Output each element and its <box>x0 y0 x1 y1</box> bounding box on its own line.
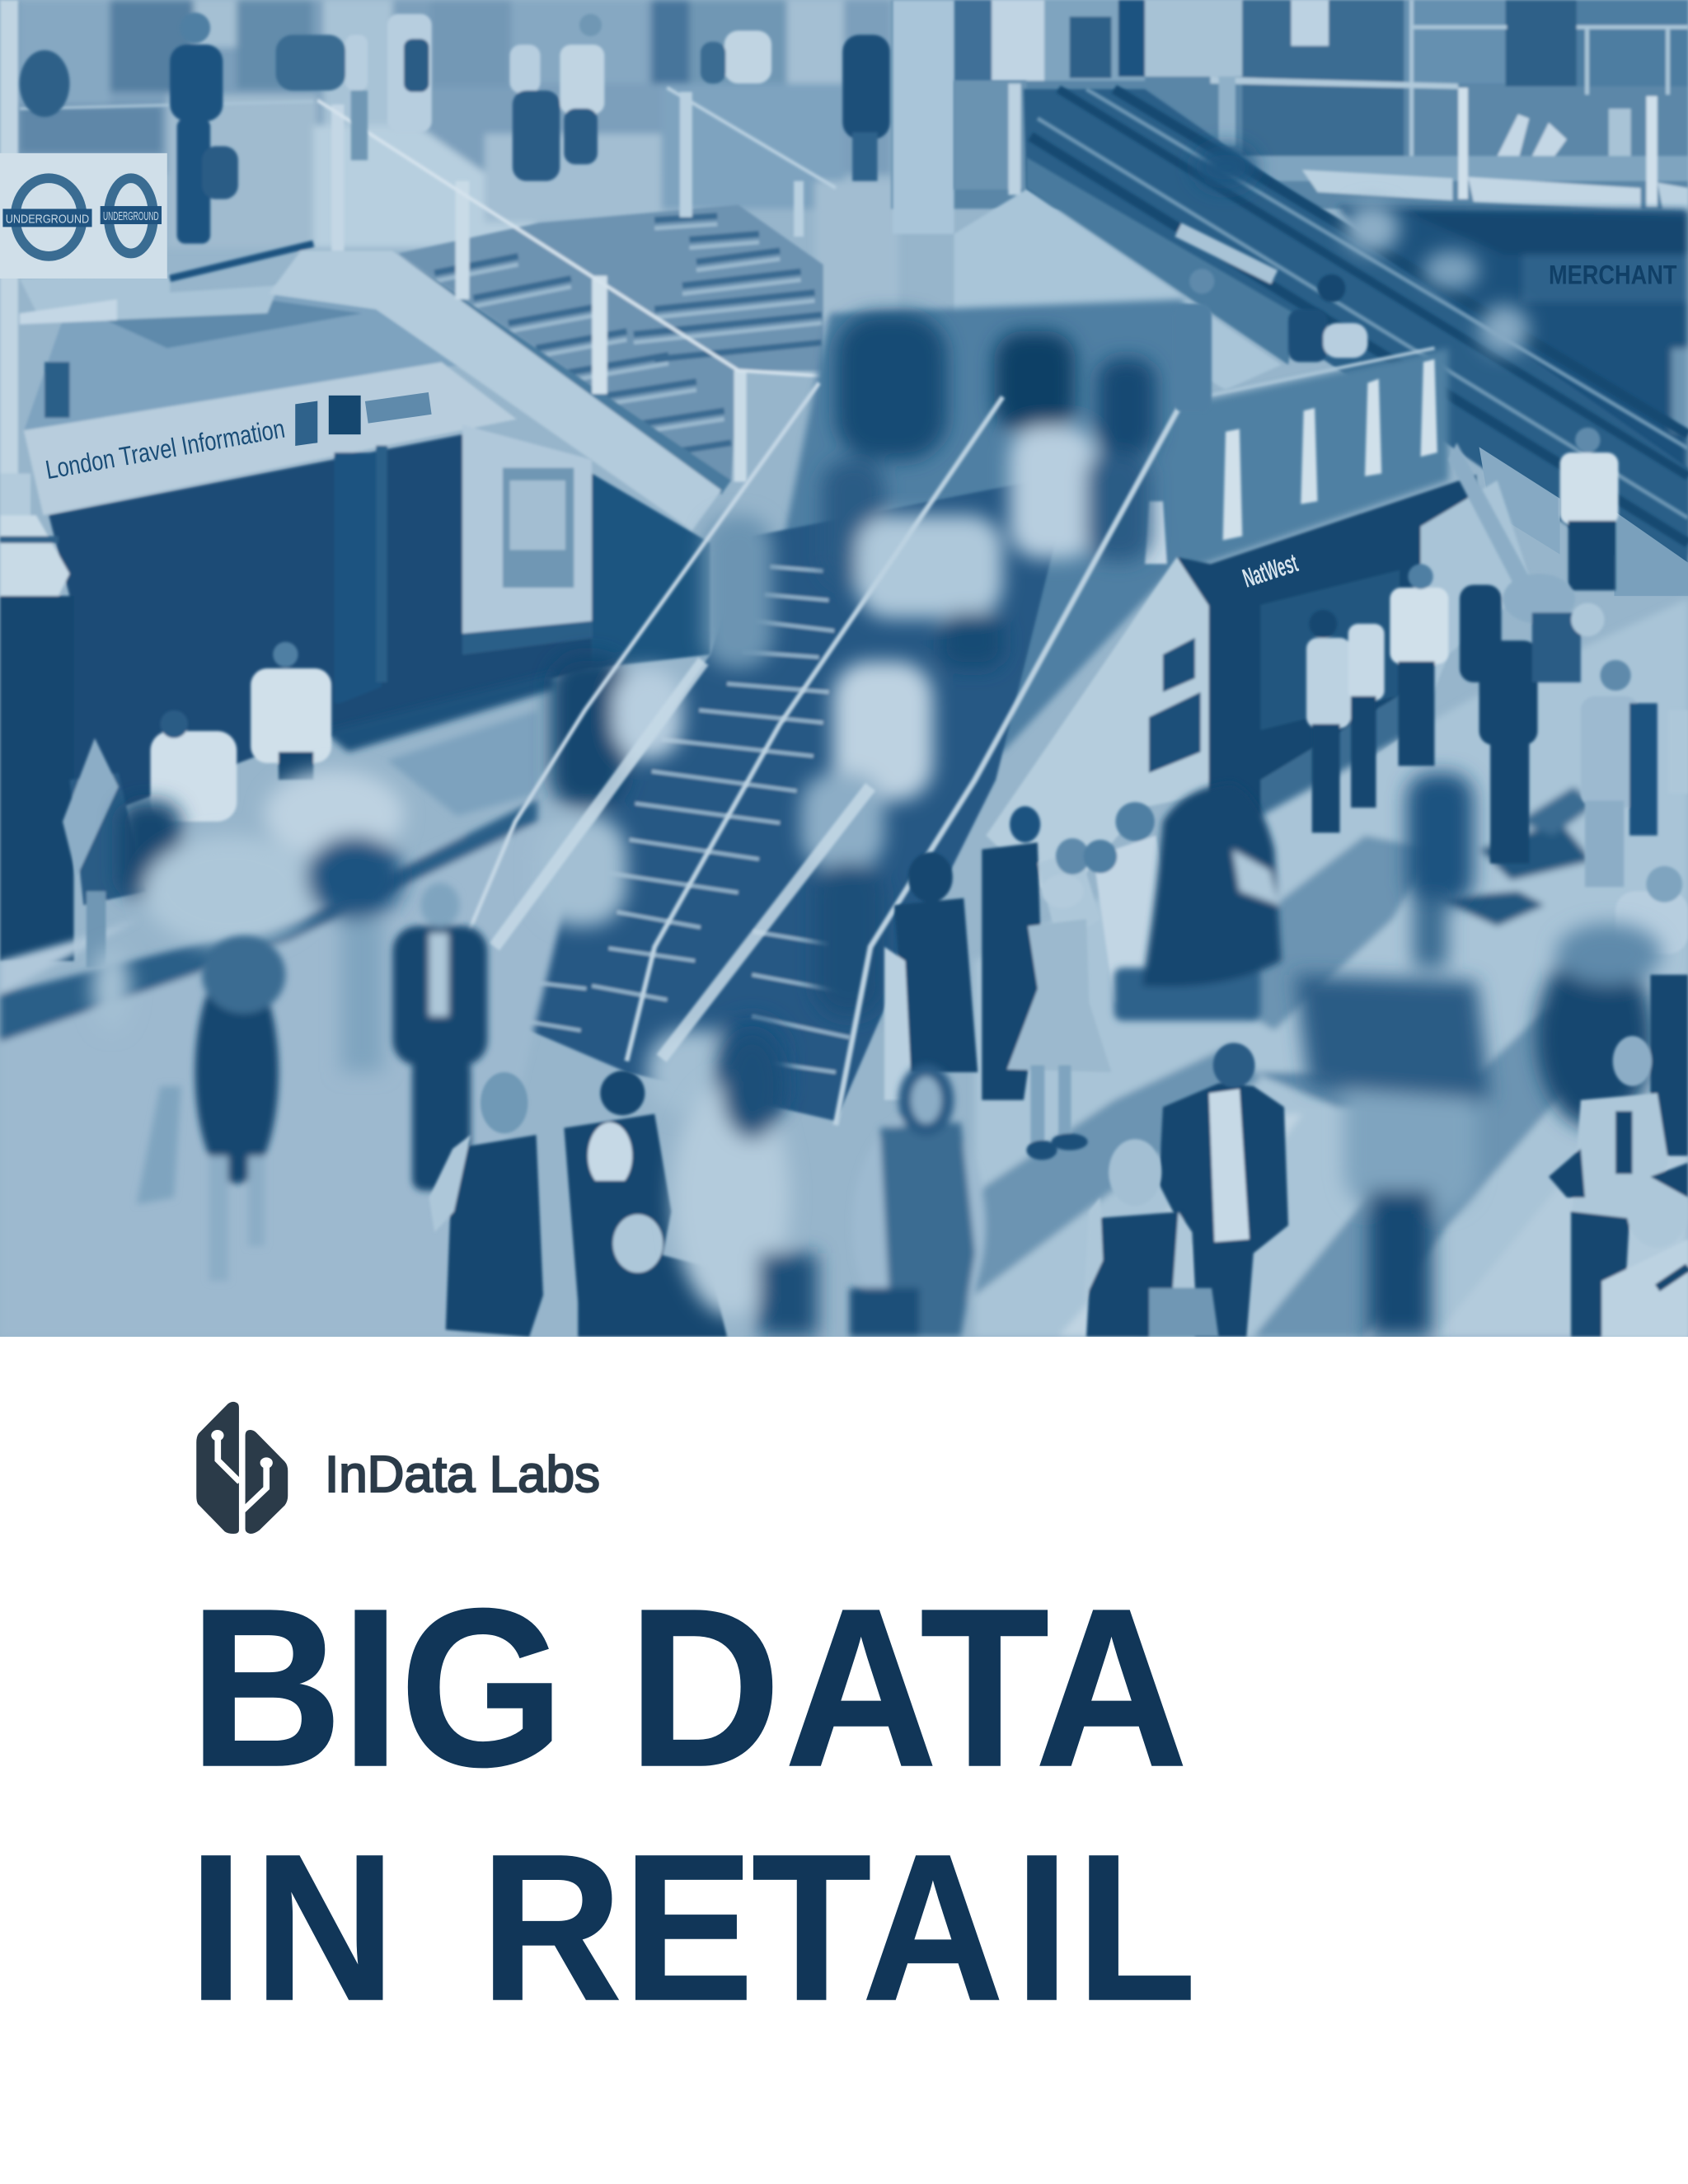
underground roundel sign <box>0 153 167 279</box>
title: big data in retail <box>189 1582 1196 2027</box>
glass balustrade posts <box>1145 348 1549 620</box>
right crowd near the booth <box>1306 564 1688 954</box>
pillar <box>893 0 954 234</box>
photo: blurred commuters in a London station, duotone blue <box>0 0 1688 1337</box>
information sign text: London Travel Information <box>43 414 287 485</box>
handrails of lower staircase <box>462 383 1181 1125</box>
stair bottom group of standing people <box>884 802 1173 1160</box>
logo circuit lines <box>214 1432 270 1511</box>
central mid tone backdrop of the blurred crowd <box>780 299 1448 752</box>
group of women at bottom centre <box>429 1071 727 1337</box>
area behind the escalator and merchant shop <box>1337 206 1688 557</box>
blurred man walking <box>1295 773 1490 1337</box>
man in dark coat <box>393 883 487 1191</box>
right top wall, windows and balcony <box>891 0 1688 213</box>
lower staircase <box>481 473 1072 1121</box>
floor stripes and mats <box>968 599 1688 1337</box>
under stair area and left column <box>0 0 710 961</box>
woman with phone <box>1084 1139 1219 1337</box>
right blurred dark group <box>1536 923 1662 1128</box>
people at the right edge <box>1549 975 1688 1337</box>
left floor strip <box>0 671 585 1337</box>
blurred woman at bottom centre <box>850 1064 986 1337</box>
woman with dark hair in motion <box>137 935 285 1281</box>
logo right half <box>246 1430 288 1534</box>
blurred crowd on the stairs <box>537 313 1156 1121</box>
natwest sign: NatWest <box>1239 547 1301 593</box>
upper staircase <box>20 87 836 531</box>
sharp figures at upper level <box>20 12 1619 590</box>
underground roundel sign: UNDERGROUND <box>6 212 89 226</box>
escalator <box>1024 89 1688 596</box>
underground roundel sign: UNDERGROUND <box>103 209 159 223</box>
logo left half <box>196 1402 239 1534</box>
seated person and bench <box>1114 783 1282 1020</box>
logo mark: InData Labs circuit hexagon <box>196 1401 288 1534</box>
right wall and cash machine booth <box>986 475 1532 905</box>
logo wordmark: InData Labs <box>325 1446 600 1503</box>
upper concourse back wall <box>0 0 898 321</box>
glass balustrade by the escalator <box>954 81 1282 418</box>
floor crowd at left <box>63 642 331 968</box>
man in suit looking at phone <box>1159 1043 1288 1337</box>
